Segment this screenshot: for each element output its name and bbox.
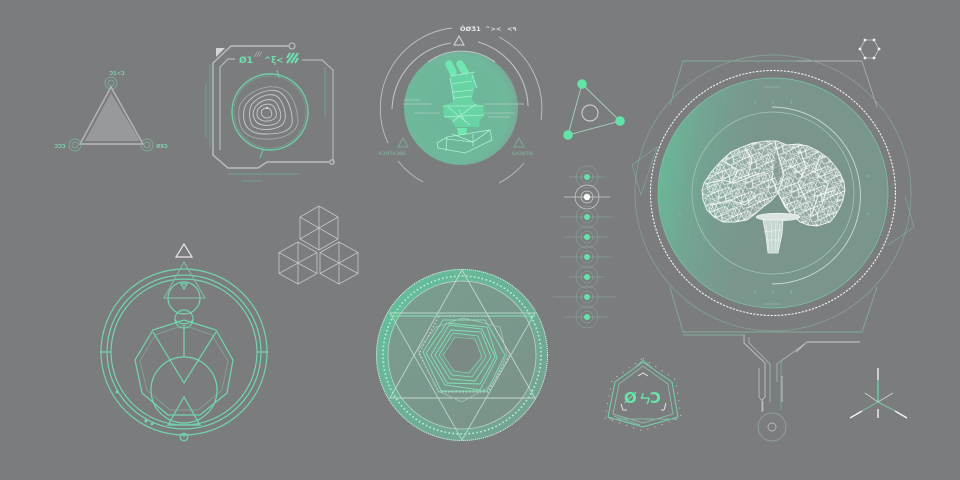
dotted border	[605, 358, 681, 431]
triangle emblem	[54, 71, 168, 151]
scanner frame	[632, 61, 914, 335]
rings	[101, 269, 267, 435]
contour lines	[239, 87, 298, 139]
microscope	[403, 64, 524, 153]
panel: alchemy circle	[100, 244, 268, 441]
white triangle	[176, 244, 192, 257]
fissure shading	[773, 150, 782, 184]
eyepieces	[449, 64, 465, 72]
connector with port	[744, 335, 860, 441]
green nodes	[584, 174, 590, 320]
panel: rune badge	[605, 358, 681, 431]
triangle labels: Ø9Ɔ	[156, 143, 168, 150]
filled inner triangle	[85, 93, 140, 141]
port circle	[758, 413, 786, 441]
highlighted white node	[564, 185, 610, 209]
nested hexagons	[418, 316, 510, 402]
white corner chevrons	[621, 373, 666, 410]
triangle labels: Ɔ1<Ɔ	[109, 71, 125, 77]
frame outlines	[213, 46, 329, 168]
triangle labels: ƆƆƆ	[54, 144, 66, 150]
ring beads	[116, 391, 153, 425]
panel: contour map frame: ///	[254, 51, 262, 58]
cerebellum	[756, 213, 800, 221]
outer ring	[635, 55, 911, 331]
neck circle	[175, 310, 193, 328]
inner ring	[388, 281, 536, 429]
microscope wire lines	[437, 72, 492, 153]
dial labels: ÓØƷ1	[460, 24, 481, 33]
microscope lens disk	[404, 51, 518, 165]
decagon body	[135, 320, 233, 415]
triangle outline	[80, 87, 143, 144]
connector traces	[744, 335, 860, 412]
panel: microscope dial: <٩	[507, 25, 516, 33]
lens scan lines	[403, 100, 524, 117]
isometric cubes	[279, 206, 358, 284]
panel: microscope dial	[379, 24, 542, 183]
V mark	[153, 325, 216, 383]
panel: rune badge: Ɔ	[650, 389, 661, 407]
disk tick marks	[678, 87, 870, 304]
icon: hexagon	[859, 39, 880, 59]
triangle labels	[54, 71, 168, 150]
green disk	[658, 78, 888, 308]
icon: three-axis star	[850, 368, 907, 418]
inner rings	[692, 112, 854, 274]
gyri and fissure lines	[705, 143, 835, 214]
rings and ticks	[553, 166, 616, 328]
panel: hexagram circle	[376, 270, 548, 440]
head circle	[168, 282, 200, 314]
panel: contour map frame	[206, 43, 334, 181]
rune text: Ø	[624, 389, 637, 407]
panel: contour map frame: ^ξ<	[264, 56, 283, 66]
dial triangles	[454, 36, 464, 45]
frame header glyphs: Ø1	[239, 55, 253, 66]
green bead ring	[383, 276, 541, 434]
green ring band	[382, 275, 542, 435]
outer dotted ring	[376, 270, 548, 440]
outer rings	[380, 28, 542, 183]
body	[443, 73, 484, 127]
corner triangle	[216, 48, 225, 57]
node circles	[69, 77, 153, 151]
brain stem	[763, 220, 783, 253]
HUD infographic canvas	[54, 25, 914, 442]
panel: microscope dial: ƐɅƆØ7Ø	[512, 150, 533, 157]
hexagram	[390, 270, 535, 398]
hatched block	[287, 53, 298, 63]
lower triangle	[168, 397, 200, 425]
contour dial	[232, 70, 308, 158]
panel: microscope dial: ƐƆØ7ɅƆØƐ	[379, 150, 406, 157]
panel: brain scanner	[632, 55, 914, 335]
dashed ring	[650, 70, 896, 316]
lower circle	[151, 357, 217, 423]
panel: microscope dial: ^><	[485, 25, 501, 33]
green triangle	[164, 262, 205, 298]
brain wireframe	[700, 138, 855, 253]
panel: rune badge: ㄣ	[639, 392, 651, 406]
triangle node network	[563, 79, 625, 140]
vertical dot column	[553, 166, 616, 328]
badge outlines	[608, 360, 678, 427]
